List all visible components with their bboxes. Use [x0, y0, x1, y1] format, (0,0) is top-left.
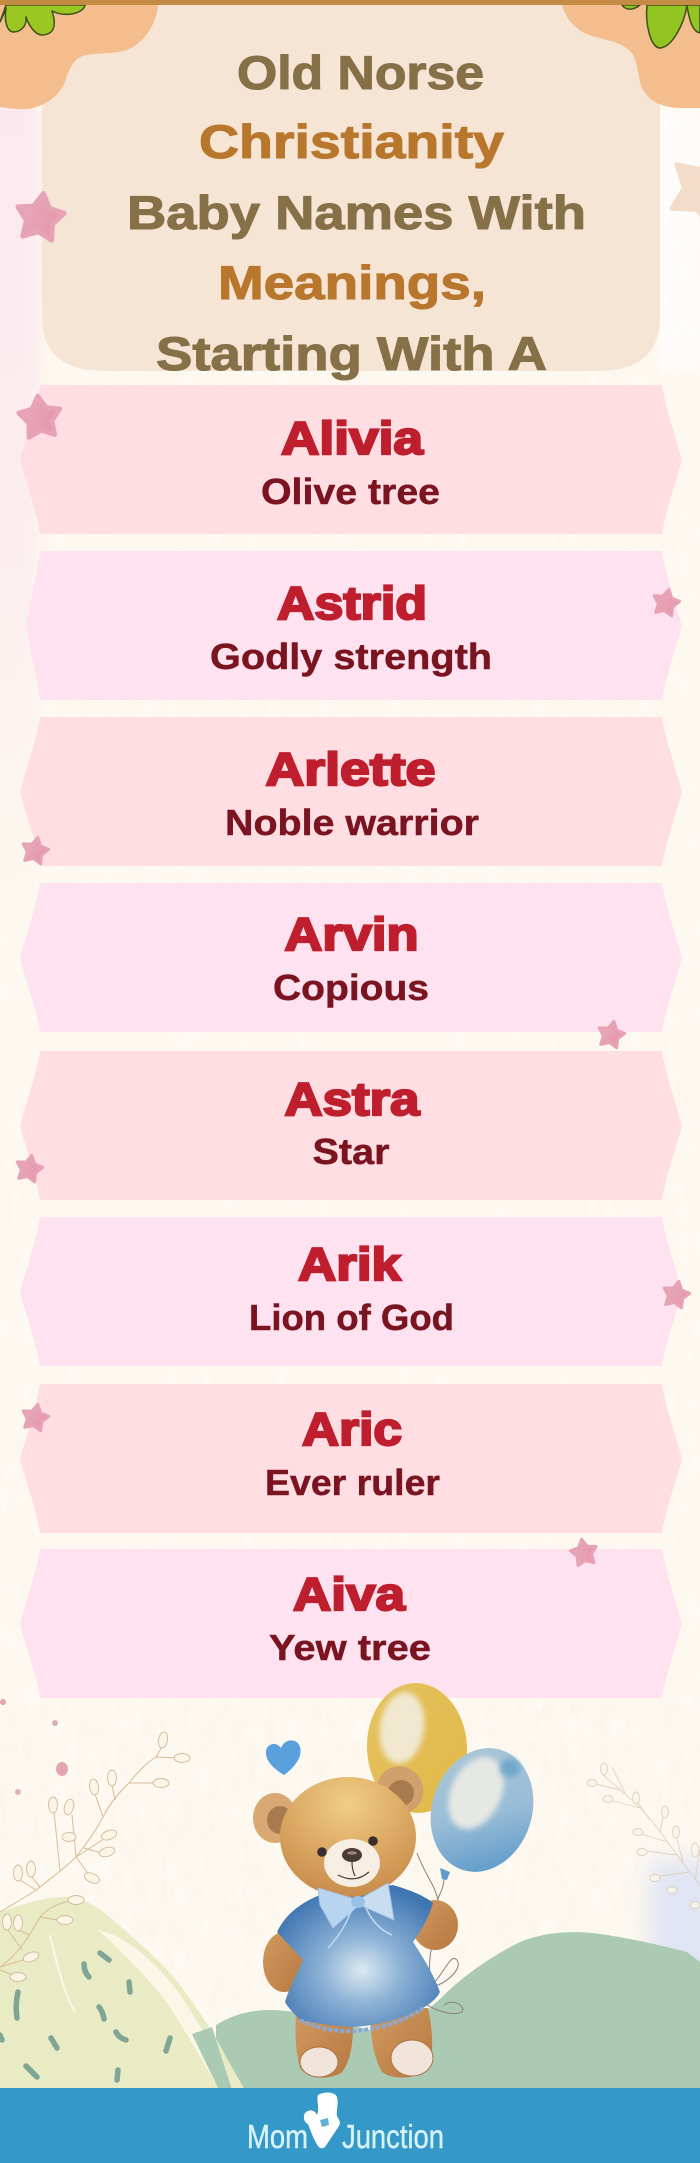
bear head: [280, 1777, 416, 1897]
logo wordmark: Junction: [342, 2118, 444, 2155]
teddy bear: [253, 1758, 458, 2078]
bear left arm: [263, 1932, 305, 1992]
panel: Arik: [20, 1217, 682, 1366]
panel: title backing: [42, 5, 660, 371]
panel: Arvin: Copious: [273, 967, 429, 1008]
star: beige top right: [652, 138, 700, 238]
panel: Aiva: [20, 1549, 682, 1698]
panel: Alivia: Olive tree: [261, 471, 440, 512]
panel: Arlette: Noble warrior: [225, 802, 479, 843]
bear dress: [277, 1885, 440, 2031]
panel: Aric: Aric: [302, 1403, 402, 1455]
branches left: [0, 1731, 190, 1982]
panel: Arik: Arik: [298, 1238, 401, 1290]
title: Meanings,: [218, 256, 486, 309]
corner blob right: [562, 5, 700, 108]
logo wordmark: Mom: [247, 2118, 308, 2155]
panel: Arvin: Arvin: [284, 908, 418, 960]
branches right: [587, 1763, 700, 1908]
stars scattered: [14, 190, 692, 1567]
panel: Astrid: Astrid: [277, 577, 427, 629]
panel: Aiva: Aiva: [293, 1568, 405, 1620]
panel: Arlette: [20, 717, 682, 866]
hill: pale green: [0, 1897, 245, 2090]
leaves top right: [622, 5, 700, 48]
blue balloon: [415, 1735, 549, 1885]
panel: Arvin: [20, 883, 682, 1032]
logo: MomJunction: [247, 2093, 444, 2155]
bear right hand: [412, 1900, 458, 1950]
title: Old Norse: [237, 46, 484, 99]
panel: Arlette: Arlette: [266, 743, 436, 795]
footer bar: [0, 2088, 700, 2163]
title: Baby Names With: [127, 186, 586, 239]
panel: Aric: Ever ruler: [265, 1462, 440, 1503]
panel: Astra: [20, 1051, 682, 1200]
corner blob left: [0, 5, 158, 109]
title: [127, 46, 586, 380]
panel: Alivia: [20, 385, 682, 534]
bear face: [317, 1836, 380, 1887]
top bar: [0, 0, 700, 5]
panel: Astra: Astra: [284, 1073, 420, 1125]
title: Christianity: [199, 115, 504, 168]
panel: Alivia: Alivia: [281, 412, 423, 464]
title: Starting With A: [156, 327, 547, 380]
panel: Astra: Star: [312, 1131, 390, 1172]
hill: sage green: [216, 1932, 700, 2090]
leaves top left: [0, 5, 85, 35]
icon: blue heart: [266, 1740, 301, 1775]
panel: Arik: Lion of God: [249, 1297, 454, 1338]
bear legs: [295, 2008, 433, 2078]
bear ears: [253, 1758, 432, 1843]
balloon strings: [417, 1853, 463, 2014]
hill stripe: [50, 1930, 232, 2090]
hill dashes: [0, 1953, 170, 2080]
panel: Aric: [20, 1384, 682, 1533]
panel: Astrid: [26, 551, 682, 700]
bear bow: [318, 1883, 394, 1948]
logo wordmark: [247, 2118, 444, 2155]
decorative dots: [0, 1699, 68, 1795]
panel: Aiva: Yew tree: [269, 1627, 431, 1668]
logo mother and child mark: [304, 2093, 340, 2148]
panel: Astrid: Godly strength: [210, 636, 492, 677]
yellow balloon: [364, 1680, 470, 1816]
